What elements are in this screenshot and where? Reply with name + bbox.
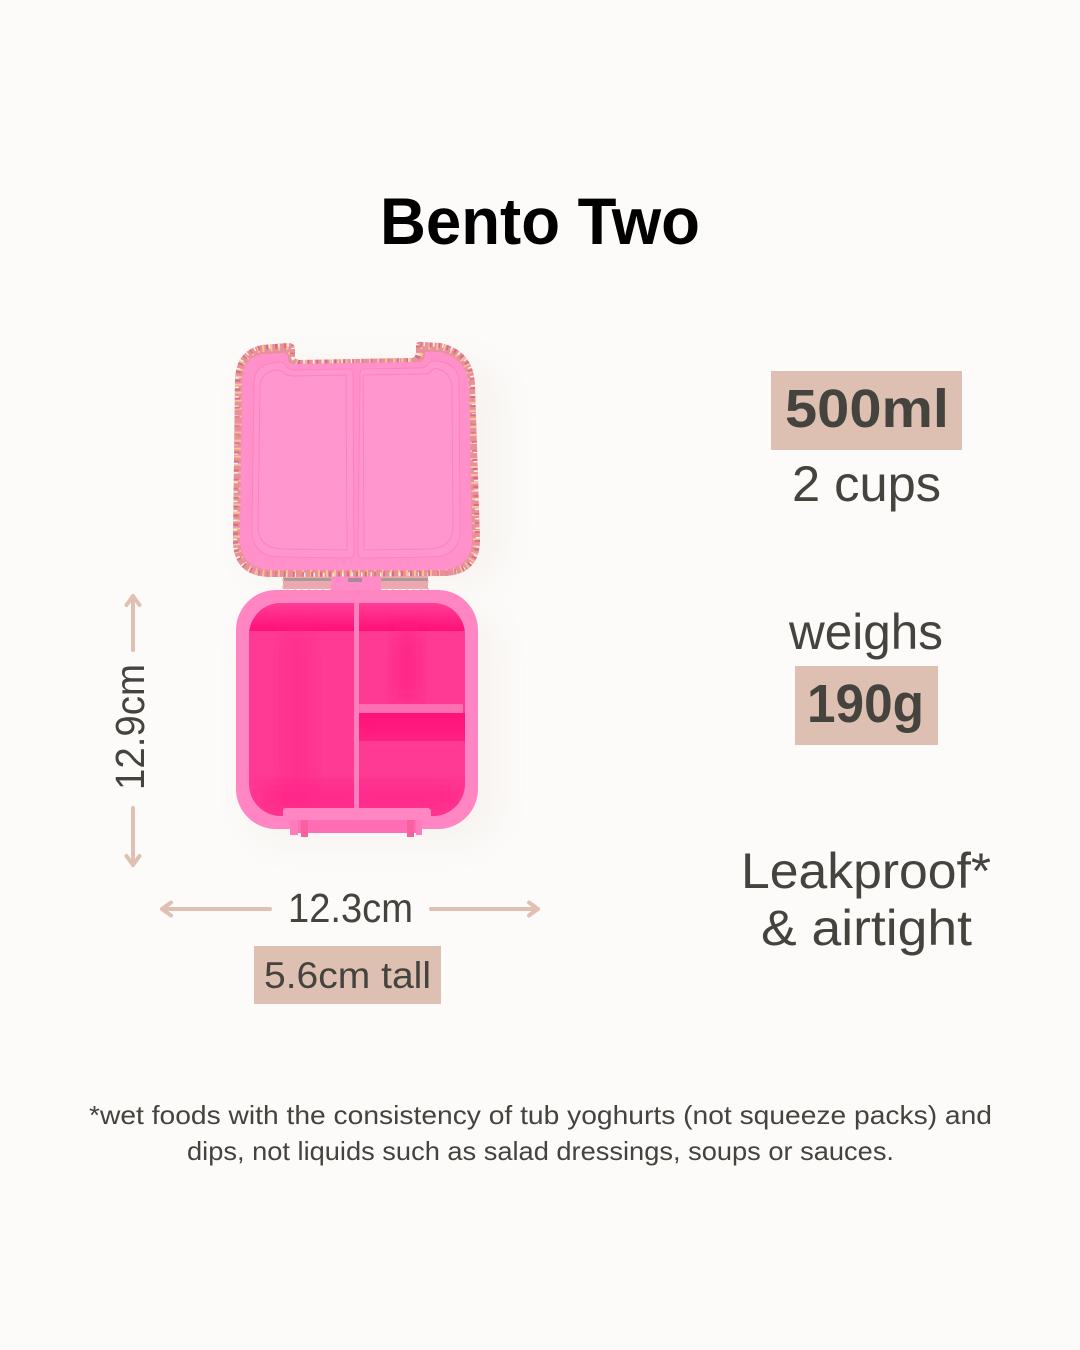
height tag (254, 946, 441, 1004)
height label: 12.9cm (107, 664, 153, 790)
hinge (283, 572, 428, 590)
arrow down (126, 808, 140, 865)
width dimension (162, 885, 538, 931)
lid with glitter rim (233, 342, 480, 577)
lid panel left (258, 370, 347, 550)
latch bar (283, 808, 431, 820)
capacity stat: 2 cups (792, 456, 941, 512)
product photo: bento box (233, 342, 480, 837)
capacity stat (771, 371, 962, 512)
leakproof note: Leakproof* (741, 843, 991, 899)
shelf divider (359, 704, 463, 713)
top walls (249, 603, 465, 631)
vertical divider (354, 603, 359, 809)
arrow left (162, 902, 270, 916)
soft shadow (245, 360, 505, 845)
title: Bento Two (380, 184, 700, 258)
footnote: *wet foods with the consistency of tub yoghurts (not squeeze packs) and (89, 1100, 992, 1130)
lid seal left (252, 362, 354, 558)
lid seal right (358, 361, 460, 558)
weight stat (788, 604, 943, 745)
capacity stat: 500ml (785, 379, 949, 439)
base tray (236, 590, 478, 829)
latch clip (290, 820, 422, 837)
infographic canvas (90, 198, 990, 1166)
arrow up (126, 596, 140, 650)
lid inner surface (240, 352, 472, 570)
lower wall under shelf (359, 713, 465, 741)
floor upper right shading (395, 631, 419, 701)
bottom shading (260, 785, 460, 810)
tray interior (249, 603, 465, 816)
height dimension (107, 596, 153, 865)
weight stat: 190g (807, 674, 924, 734)
arrow right (431, 902, 538, 916)
weight stat: weighs (788, 604, 943, 660)
width label: 12.3cm (288, 885, 413, 931)
height tag: 5.6cm tall (264, 955, 431, 996)
footnote (89, 1100, 992, 1166)
footnote: dips, not liquids such as salad dressings, soups or sauces. (187, 1136, 894, 1166)
lid panel right (363, 369, 453, 550)
floor left shading (288, 642, 306, 778)
leakproof note: & airtight (761, 900, 972, 956)
leakproof note (741, 843, 991, 956)
